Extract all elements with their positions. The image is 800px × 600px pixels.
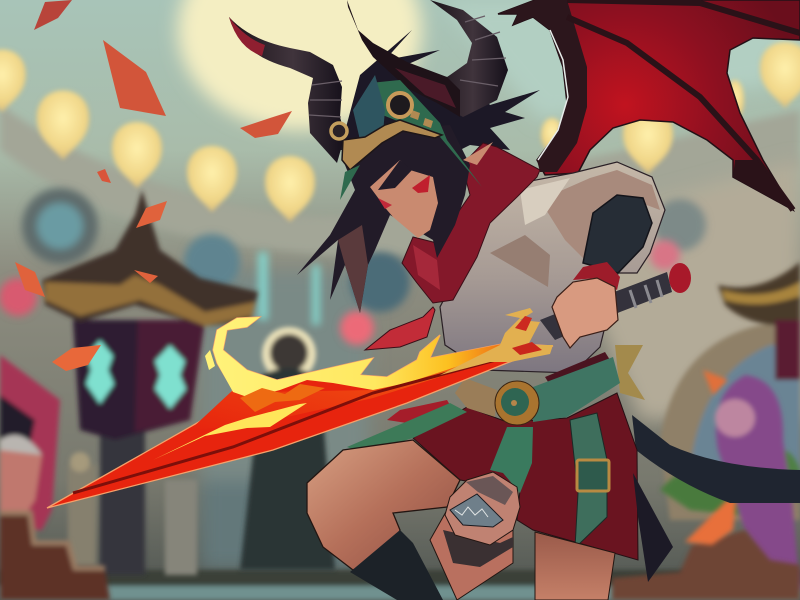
sword hilt and pommel	[540, 263, 691, 340]
foreground left: pink frame, figure and stairs	[0, 355, 110, 600]
orange crystal shard	[685, 490, 737, 545]
central hall wall	[200, 270, 380, 570]
flaming sword	[47, 317, 553, 508]
dark silhouette figure with halo	[240, 327, 335, 570]
floor	[0, 570, 800, 600]
fist	[552, 278, 618, 348]
bat wing	[498, 0, 800, 210]
wall medallions and pink glows	[0, 188, 706, 345]
green headband and helmet mask	[331, 75, 482, 200]
black boot	[350, 530, 443, 600]
glowing ceiling dome	[178, 0, 800, 130]
hair spikes behind head	[340, 30, 540, 150]
hanging lanterns	[0, 42, 800, 222]
hair mass and face	[297, 125, 493, 313]
ceiling arch band	[0, 105, 800, 256]
foreground right: stairs	[612, 530, 800, 600]
tail	[632, 415, 800, 503]
green sash and straps	[347, 400, 609, 548]
golden crossguard	[440, 308, 553, 375]
red wristband	[573, 262, 620, 290]
scarf	[365, 143, 540, 350]
floating red petals	[15, 0, 292, 371]
right leg	[535, 532, 615, 600]
purple robed background character	[660, 370, 800, 590]
knee guard	[430, 472, 520, 600]
shirt folds and shadow	[490, 170, 660, 287]
horns	[229, 0, 508, 163]
belt with round buckle	[455, 352, 620, 425]
torso shirt	[440, 162, 665, 373]
pagoda tower, left	[42, 190, 258, 575]
black back flap and tan cloth	[615, 345, 673, 582]
lower skirt	[413, 393, 638, 560]
black arm guard	[583, 195, 652, 273]
right hall wall	[560, 160, 800, 420]
bent leg thigh	[307, 440, 460, 570]
pagoda and arch, right	[660, 262, 800, 520]
